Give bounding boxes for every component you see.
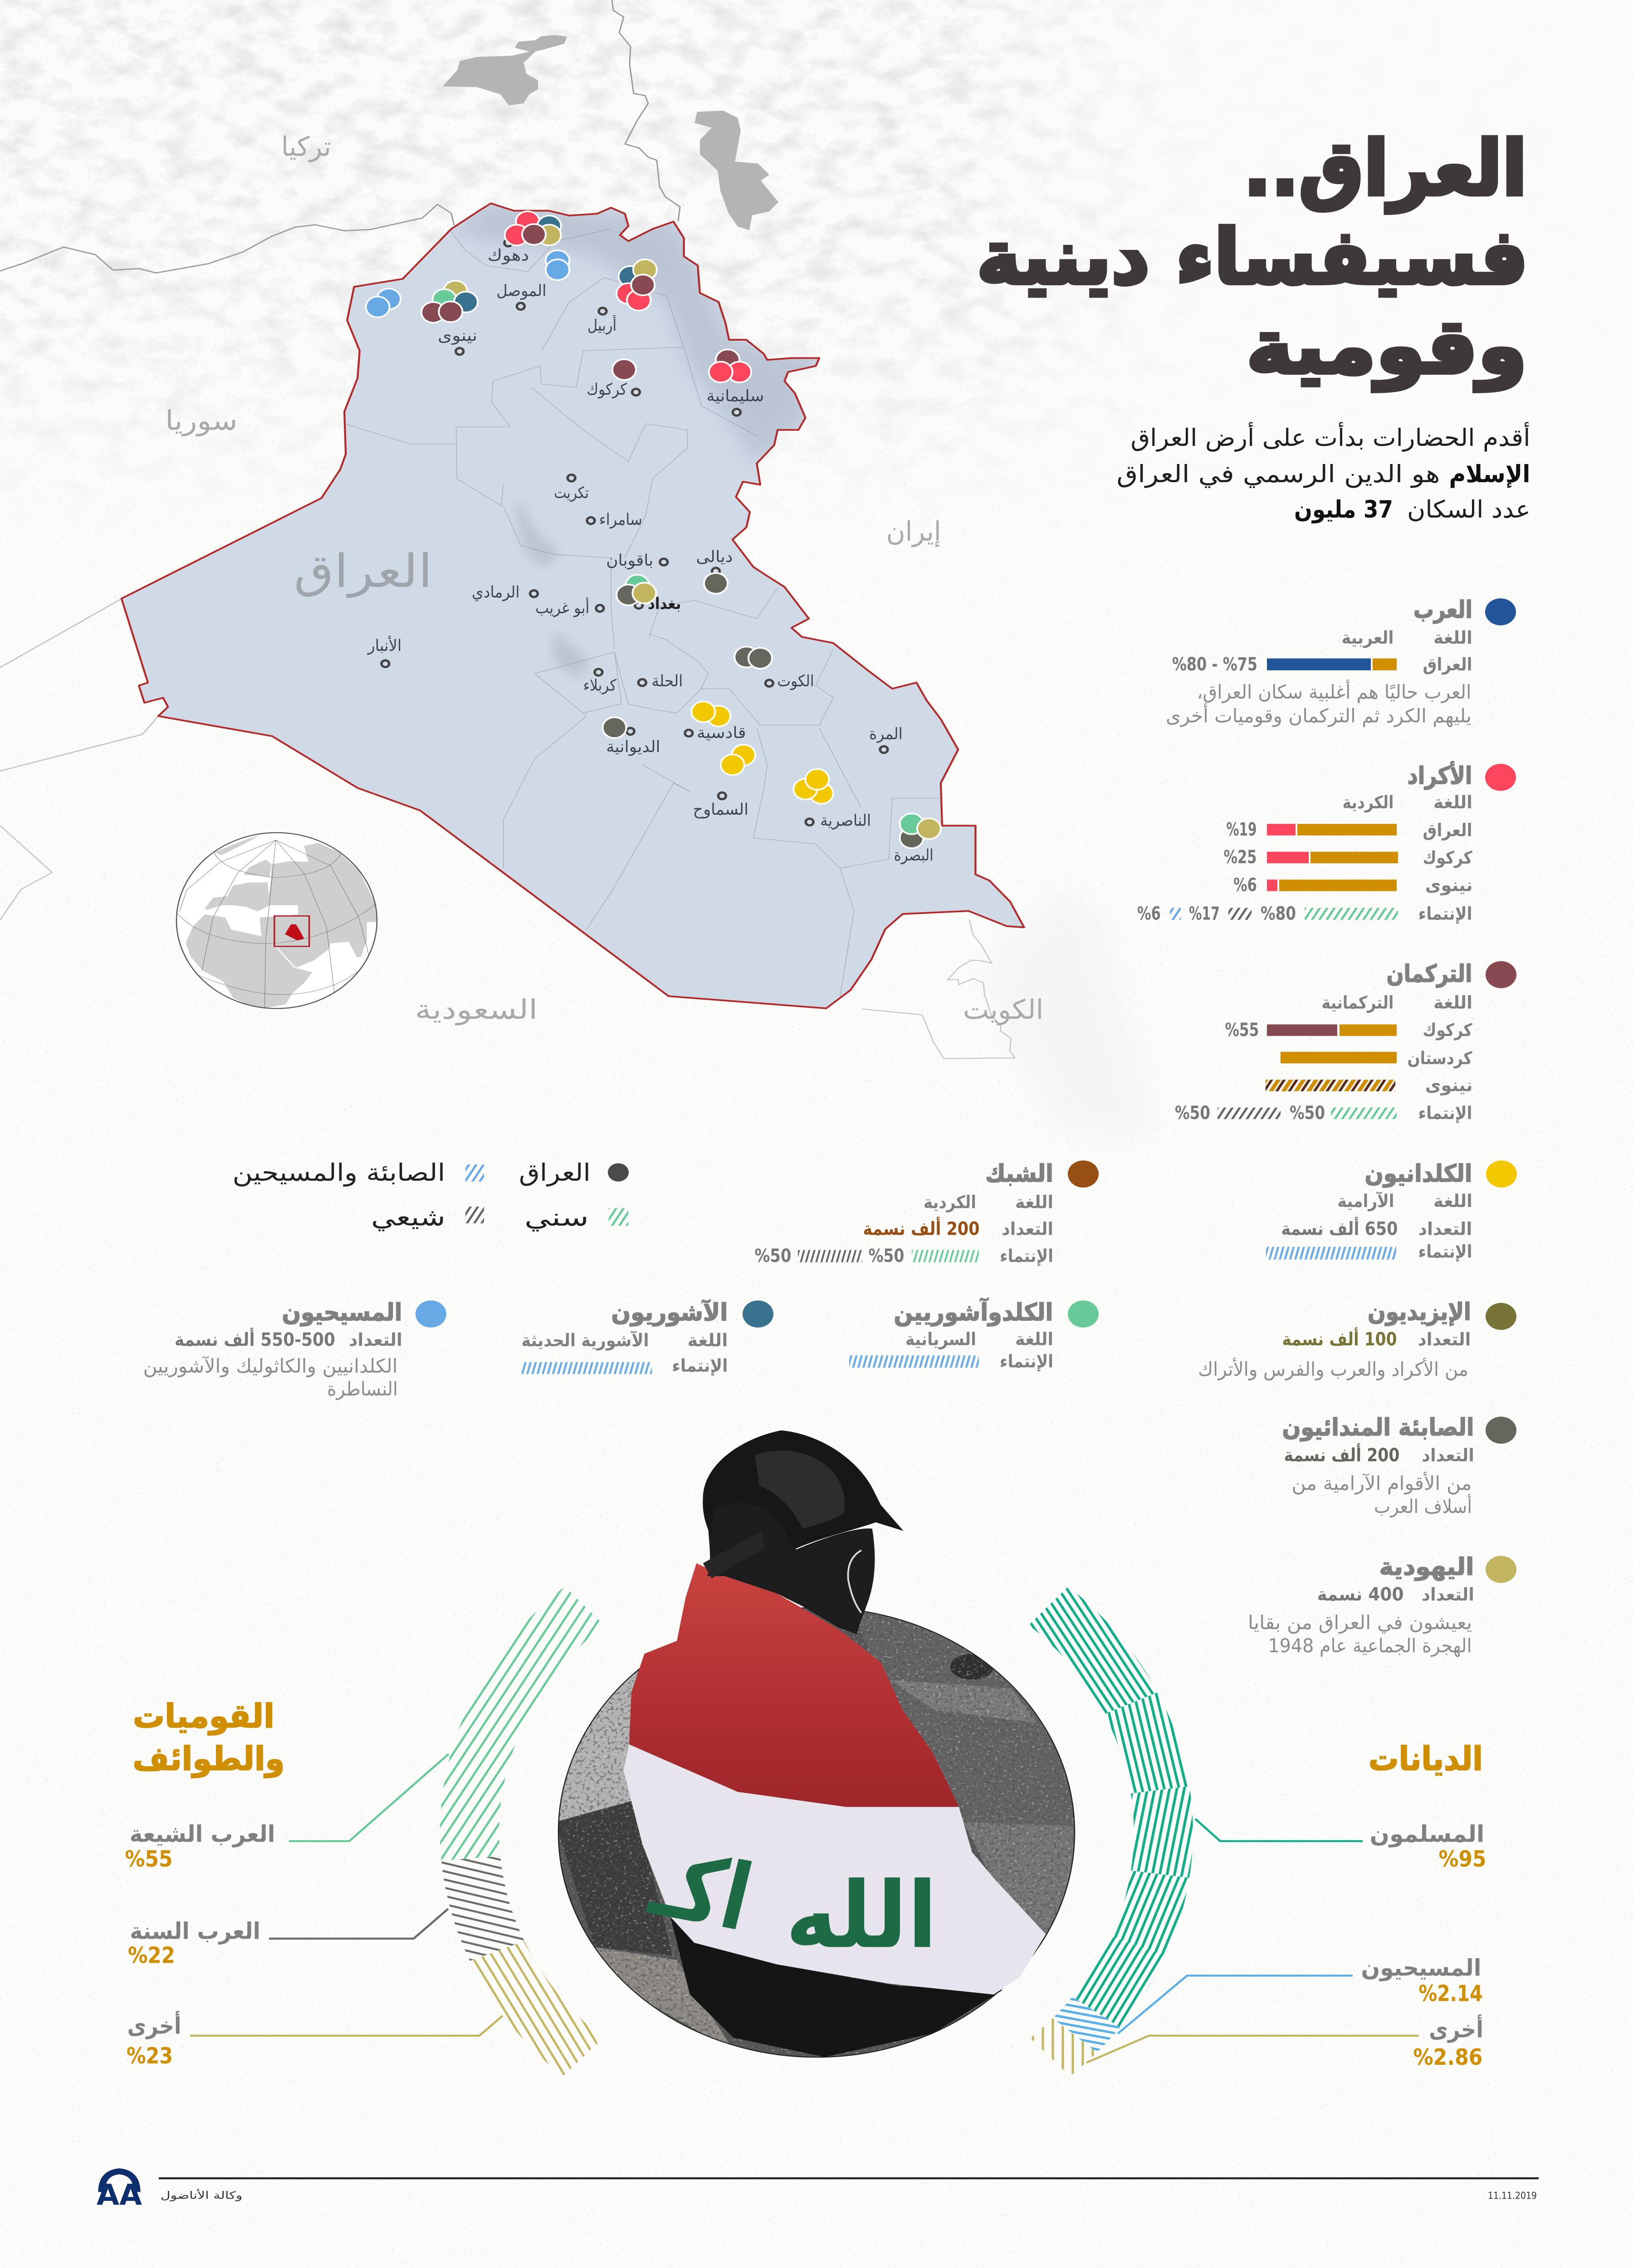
panel: chaldeans (1266, 1160, 1517, 1262)
map: city labels: سامراء (599, 510, 642, 529)
legend: sunni: سني (524, 1204, 589, 1232)
map: country labels: الكويت (963, 994, 1043, 1026)
icon: shabak dot (1068, 1160, 1099, 1188)
icon: jews dot (1486, 1556, 1516, 1583)
legend: sunni (524, 1204, 628, 1232)
yazidis population (1282, 1327, 1471, 1350)
title: فسيفساء دينية (977, 214, 1528, 302)
kurds bar kirkuk (1224, 847, 1472, 868)
footer: date: 11.11.2019 (1488, 2190, 1537, 2201)
yazidis description: من الأكراد والعرب والفرس والأتراك (1198, 1357, 1468, 1381)
map: city labels: البصرة (894, 846, 934, 864)
map: city labels: بغداد (648, 594, 681, 613)
kurds affiliation: %6 (1137, 903, 1161, 924)
map: city labels: الحلة (651, 671, 683, 690)
man: cap (703, 1430, 904, 1549)
shabak population (863, 1217, 1053, 1240)
label: christians: المسيحيون (1361, 1954, 1481, 1981)
heading: ethnicities (132, 1697, 285, 1778)
flag: takbir text (640, 1830, 937, 1969)
map: city labels: سليمانية (706, 386, 764, 405)
kurds bar iraq: %19 (1226, 819, 1257, 840)
map: country labels (165, 131, 1043, 1026)
map of iraq (122, 131, 1043, 1026)
label: sunni arabs: العرب السنة (130, 1917, 260, 1945)
label: shia arabs: العرب الشيعة (130, 1820, 275, 1848)
map: city labels: السماوح (693, 800, 748, 819)
chaldo-assyrians language (905, 1329, 1053, 1350)
christians population: التعداد (349, 1330, 402, 1350)
arabs description: العرب حاليًا هم أغلبية سكان العراق، (1197, 679, 1471, 703)
turkmen bar kirkuk (1225, 1019, 1472, 1041)
turkmen language: اللغة (1433, 992, 1472, 1013)
chart: right arc religions (1029, 1587, 1193, 2076)
shabak affiliation: %50 (868, 1246, 904, 1266)
border: turkey syria (0, 204, 454, 273)
icon: christians dot (416, 1300, 446, 1328)
globe: outline (176, 833, 377, 1008)
kurds affiliation: %80 (1261, 903, 1296, 924)
lake urmia (694, 111, 778, 230)
man: cap strap (703, 1531, 765, 1579)
label: muslims (1369, 1820, 1486, 1872)
mandaeans population: التعداد (1422, 1445, 1474, 1466)
man: cap highlight (755, 1450, 845, 1529)
turkmen bar kirkuk: %55 (1225, 1019, 1259, 1041)
panel: turkmen (1175, 960, 1516, 1124)
heading: yazidis: الإيزيديون (1368, 1298, 1471, 1326)
kurds bar nineveh (1233, 875, 1472, 896)
christians description: الكلدانيين والكاثوليك والآشوريين (143, 1355, 397, 1378)
leader lines (190, 1754, 1419, 2063)
border: kuwait (862, 920, 1015, 1059)
shabak population: التعداد (1002, 1219, 1053, 1239)
panel: chaldo-assyrians (849, 1298, 1099, 1372)
map: country labels: تركيا (281, 131, 331, 163)
title (977, 125, 1528, 391)
map: country labels: السعودية (415, 994, 538, 1026)
panel: arabs (1166, 596, 1516, 728)
map: city labels: دهوك (487, 246, 529, 264)
label: other religions: أخرى (1429, 2014, 1483, 2043)
locator globe (176, 833, 377, 1008)
kurds affiliation (1137, 903, 1472, 924)
title: وقومية (1247, 303, 1527, 391)
heading: arabs: العرب (1413, 596, 1472, 624)
kurds bar nineveh: نينوى (1425, 875, 1472, 896)
map: city labels: كركوك (587, 380, 627, 398)
turkmen language (1322, 992, 1472, 1013)
kurds bar iraq (1226, 819, 1472, 841)
heading: mandaeans: الصابئة المندائيون (1282, 1414, 1474, 1441)
legend: shia: شيعي (371, 1204, 445, 1231)
label: other religions: %2.86 (1413, 2044, 1482, 2070)
map: city markers (381, 240, 888, 826)
shabak affiliation: %50 (754, 1246, 791, 1266)
heading: turkmen: التركمان (1386, 960, 1472, 988)
mandaeans description: أسلاف العرب (1374, 1494, 1472, 1518)
intro text: 37 مليون (1294, 496, 1393, 523)
map: iraq territory (122, 203, 1024, 1008)
turkmen bar kirkuk: كركوك (1423, 1020, 1472, 1041)
kurds language (1343, 792, 1472, 813)
turkmen bar nineveh: نينوى (1425, 1075, 1472, 1096)
globe: land and graticule (178, 836, 377, 1008)
turkmen affiliation: %50 (1175, 1103, 1210, 1124)
shabak population: 200 ألف نسمة (863, 1217, 980, 1240)
legend: affiliation (232, 1159, 629, 1232)
chaldeans language (1337, 1191, 1472, 1211)
flag: takbir text: اكـ (640, 1830, 762, 1952)
christians population: 550-500 ألف نسمة (175, 1328, 335, 1350)
kurds bar nineveh: %6 (1233, 875, 1257, 896)
arabs bar iraq: العراق (1423, 654, 1472, 675)
map: city labels: الديوانية (606, 737, 660, 756)
map: city labels: كربلاء (583, 676, 616, 694)
heading: ethnicities: والطوائف (132, 1740, 284, 1778)
icon: mandaeans dot (1486, 1417, 1516, 1444)
label: shia arabs (125, 1820, 275, 1872)
label: other ethnicities: %23 (127, 2043, 173, 2069)
map: provincial boundaries (345, 229, 941, 996)
map: city labels: الموصل (496, 281, 547, 300)
legend: iraq (519, 1159, 629, 1187)
intro text: هو الدين الرسمي في العراق (1117, 460, 1440, 488)
label: christians: %2.14 (1419, 1981, 1483, 2007)
map: country labels: سوريا (165, 405, 237, 437)
turkmen bar kurdistan: كردستان (1407, 1048, 1472, 1069)
assyrians affiliation (522, 1356, 728, 1376)
icon: chaldo-assyrians dot (1068, 1300, 1099, 1328)
chaldo-assyrians language: اللغة (1015, 1329, 1053, 1349)
man: earphone (848, 1550, 861, 1613)
lake van (443, 35, 567, 105)
heading: ethnicities: القوميات (133, 1697, 274, 1735)
heading: kurds: الأكراد (1407, 761, 1472, 790)
icon: chaldeans dot (1486, 1160, 1517, 1188)
kurds affiliation: الإنتماء (1418, 904, 1472, 924)
map: city labels: قادسية (697, 723, 746, 742)
map: city labels: تكريت (554, 483, 589, 502)
icon: assyrians dot (743, 1300, 773, 1328)
kurds bar iraq: العراق (1423, 820, 1472, 841)
title: العراق.. (1243, 125, 1527, 213)
legend: iraq: العراق (519, 1159, 591, 1187)
chaldeans population (1281, 1217, 1472, 1240)
intro text (1117, 422, 1530, 523)
flag: white band (624, 1745, 1046, 1994)
assyrians language: الآشورية الحديثة (521, 1330, 649, 1351)
turkmen affiliation: %50 (1290, 1103, 1325, 1124)
shabak language: الكردية (924, 1192, 976, 1213)
arabs language (1341, 628, 1472, 648)
map: city labels (367, 246, 934, 864)
kurds language: اللغة (1433, 792, 1472, 812)
jews population: 400 نسمة (1317, 1584, 1403, 1605)
chaldeans population: التعداد (1418, 1219, 1472, 1239)
arabs description: يليهم الكرد ثم التركمان وقوميات أخرى (1166, 704, 1472, 728)
border: syria saudi west (0, 599, 158, 771)
background: relief fade on right (930, 0, 1633, 557)
label: muslims: %95 (1438, 1846, 1486, 1872)
icon: arabs dot (1485, 598, 1516, 626)
chart: left arc ethnicities (440, 1587, 604, 2076)
map: lake razzaza (552, 631, 590, 679)
kurds bar kirkuk: كركوك (1423, 848, 1472, 868)
jews description: يعيشون في العراق من بقايا (1248, 1611, 1472, 1634)
heading: chaldo-assyrians: الكلدوآشوريين (894, 1298, 1053, 1326)
shabak language: اللغة (1015, 1192, 1053, 1212)
icon: anadolu agency logo: AA (97, 2178, 142, 2211)
map: mountain shade (451, 203, 819, 464)
background: persian gulf shade (984, 885, 1151, 1140)
intro text: عدد السكان (1407, 496, 1530, 523)
icon: yazidis dot (1486, 1303, 1516, 1330)
kurds affiliation: %17 (1189, 903, 1220, 924)
map: city labels: نينوى (438, 326, 477, 345)
panel: kurds (1137, 761, 1516, 924)
heading: chaldeans: الكلدانيون (1364, 1160, 1472, 1188)
chaldeans affiliation (1266, 1242, 1472, 1262)
map: iraq outer border (122, 203, 1024, 1008)
label: other religions (1413, 2014, 1483, 2070)
assyrians affiliation: الإنتماء (672, 1356, 728, 1376)
christians description (143, 1355, 398, 1400)
heading: jews: اليهودية (1379, 1554, 1474, 1581)
panel: christians (143, 1299, 446, 1400)
jews population (1317, 1584, 1474, 1605)
label: muslims: المسلمون (1369, 1820, 1484, 1848)
jews description (1248, 1611, 1472, 1657)
turkmen affiliation: الإنتماء (1418, 1103, 1472, 1123)
arabs bar iraq: %80 - %75 (1172, 654, 1257, 675)
label: sunni arabs (128, 1917, 260, 1968)
chaldeans population: 650 ألف نسمة (1281, 1217, 1398, 1240)
christians description: النساطرة (327, 1378, 398, 1400)
turkmen affiliation (1175, 1103, 1472, 1124)
map: country labels: العراق (293, 545, 433, 598)
mandaeans population: 200 ألف نسمة (1284, 1443, 1399, 1466)
map: city labels: أربيل (587, 315, 616, 334)
chaldeans language: الآرامية (1337, 1191, 1394, 1211)
kurds language: الكردية (1343, 792, 1394, 813)
map: city labels: ديالى (696, 547, 733, 566)
chaldo-assyrians affiliation (849, 1351, 1053, 1372)
chaldeans affiliation: الإنتماء (1418, 1242, 1472, 1262)
jews description: الهجرة الجماعية عام 1948 (1268, 1634, 1472, 1657)
map: city labels: الأنبار (367, 635, 401, 655)
arabs language: العربية (1341, 628, 1393, 648)
flag: takbir text: الله (785, 1862, 937, 1969)
turkmen language: التركمانية (1322, 992, 1393, 1013)
footer rule (159, 2177, 1539, 2179)
heading: shabak: الشبك (985, 1160, 1053, 1188)
map: city labels: المرة (869, 724, 903, 743)
map: community pins (366, 211, 941, 848)
label: shia arabs: %55 (125, 1846, 172, 1872)
label: sunni arabs: %22 (128, 1943, 175, 1968)
legend: shia (371, 1204, 484, 1231)
shabak affiliation: الإنتماء (1000, 1246, 1053, 1266)
label: other ethnicities (127, 2011, 181, 2069)
shabak language (924, 1192, 1053, 1213)
intro text: الإسلام (1449, 460, 1530, 488)
border: turkey iran (612, 0, 680, 221)
photo: protest square circle (544, 1591, 1089, 2069)
panel: yazidis (1198, 1298, 1516, 1381)
flag: black band (670, 1917, 1002, 2057)
chaldo-assyrians affiliation: الإنتماء (1000, 1351, 1053, 1372)
jews population: التعداد (1422, 1584, 1474, 1605)
chaldo-assyrians language: السريانية (905, 1329, 976, 1350)
panel: mandaeans (1282, 1414, 1516, 1518)
label: other ethnicities: أخرى (127, 2011, 181, 2039)
map: city labels: الكوت (777, 671, 814, 690)
arabs bar iraq (1172, 654, 1472, 675)
map: city labels: باقوبان (606, 551, 653, 569)
photo: man wrapped in flag (624, 1430, 1046, 2057)
background: terrain relief (0, 0, 1129, 436)
map: country labels: إيران (886, 516, 941, 547)
assyrians language: اللغة (687, 1330, 728, 1350)
mandaeans description: من الأقوام الآرامية من (1292, 1471, 1472, 1495)
map: city labels: أبو غريب (535, 597, 589, 617)
icon: turkmen dot (1486, 961, 1516, 988)
chaldeans language: اللغة (1433, 1191, 1472, 1211)
heading: religions: الديانات (1369, 1740, 1483, 1778)
legend: sabians and christians: الصابئة والمسيحين (232, 1159, 445, 1187)
panel: jews (1248, 1554, 1516, 1657)
arabs description (1166, 679, 1472, 728)
turkmen bar nineveh (1266, 1075, 1472, 1096)
photo: circle edge (558, 1608, 1075, 2057)
mandaeans description (1292, 1471, 1472, 1518)
map: city labels: الرمادي (472, 582, 520, 601)
map: city labels: الناصرية (820, 811, 871, 830)
mandaeans population (1284, 1443, 1474, 1466)
man: neck and hair (707, 1500, 875, 1634)
icon: kurds dot (1485, 764, 1516, 791)
turkmen bar kurdistan (1281, 1048, 1472, 1069)
map: lake tharthar (514, 500, 559, 567)
kurds bar kirkuk: %25 (1224, 847, 1257, 868)
shabak affiliation (754, 1246, 1053, 1266)
yazidis population: 100 ألف نسمة (1282, 1327, 1397, 1350)
panel: assyrians (521, 1299, 773, 1376)
flag: red band (629, 1563, 959, 1807)
globe: ocean disc (176, 833, 377, 1008)
heading: christians: المسيحيون (282, 1299, 402, 1326)
arabs language: اللغة (1433, 628, 1472, 648)
border: jordan (0, 826, 52, 920)
heading: assyrians: الآشوريون (611, 1299, 728, 1326)
label: christians (1361, 1954, 1482, 2007)
intro text: أقدم الحضارات بدأت على أرض العراق (1130, 422, 1530, 452)
yazidis population: التعداد (1418, 1330, 1471, 1349)
footer: agency name: وكالة الأناضول (160, 2189, 242, 2201)
panel: shabak (754, 1160, 1099, 1266)
